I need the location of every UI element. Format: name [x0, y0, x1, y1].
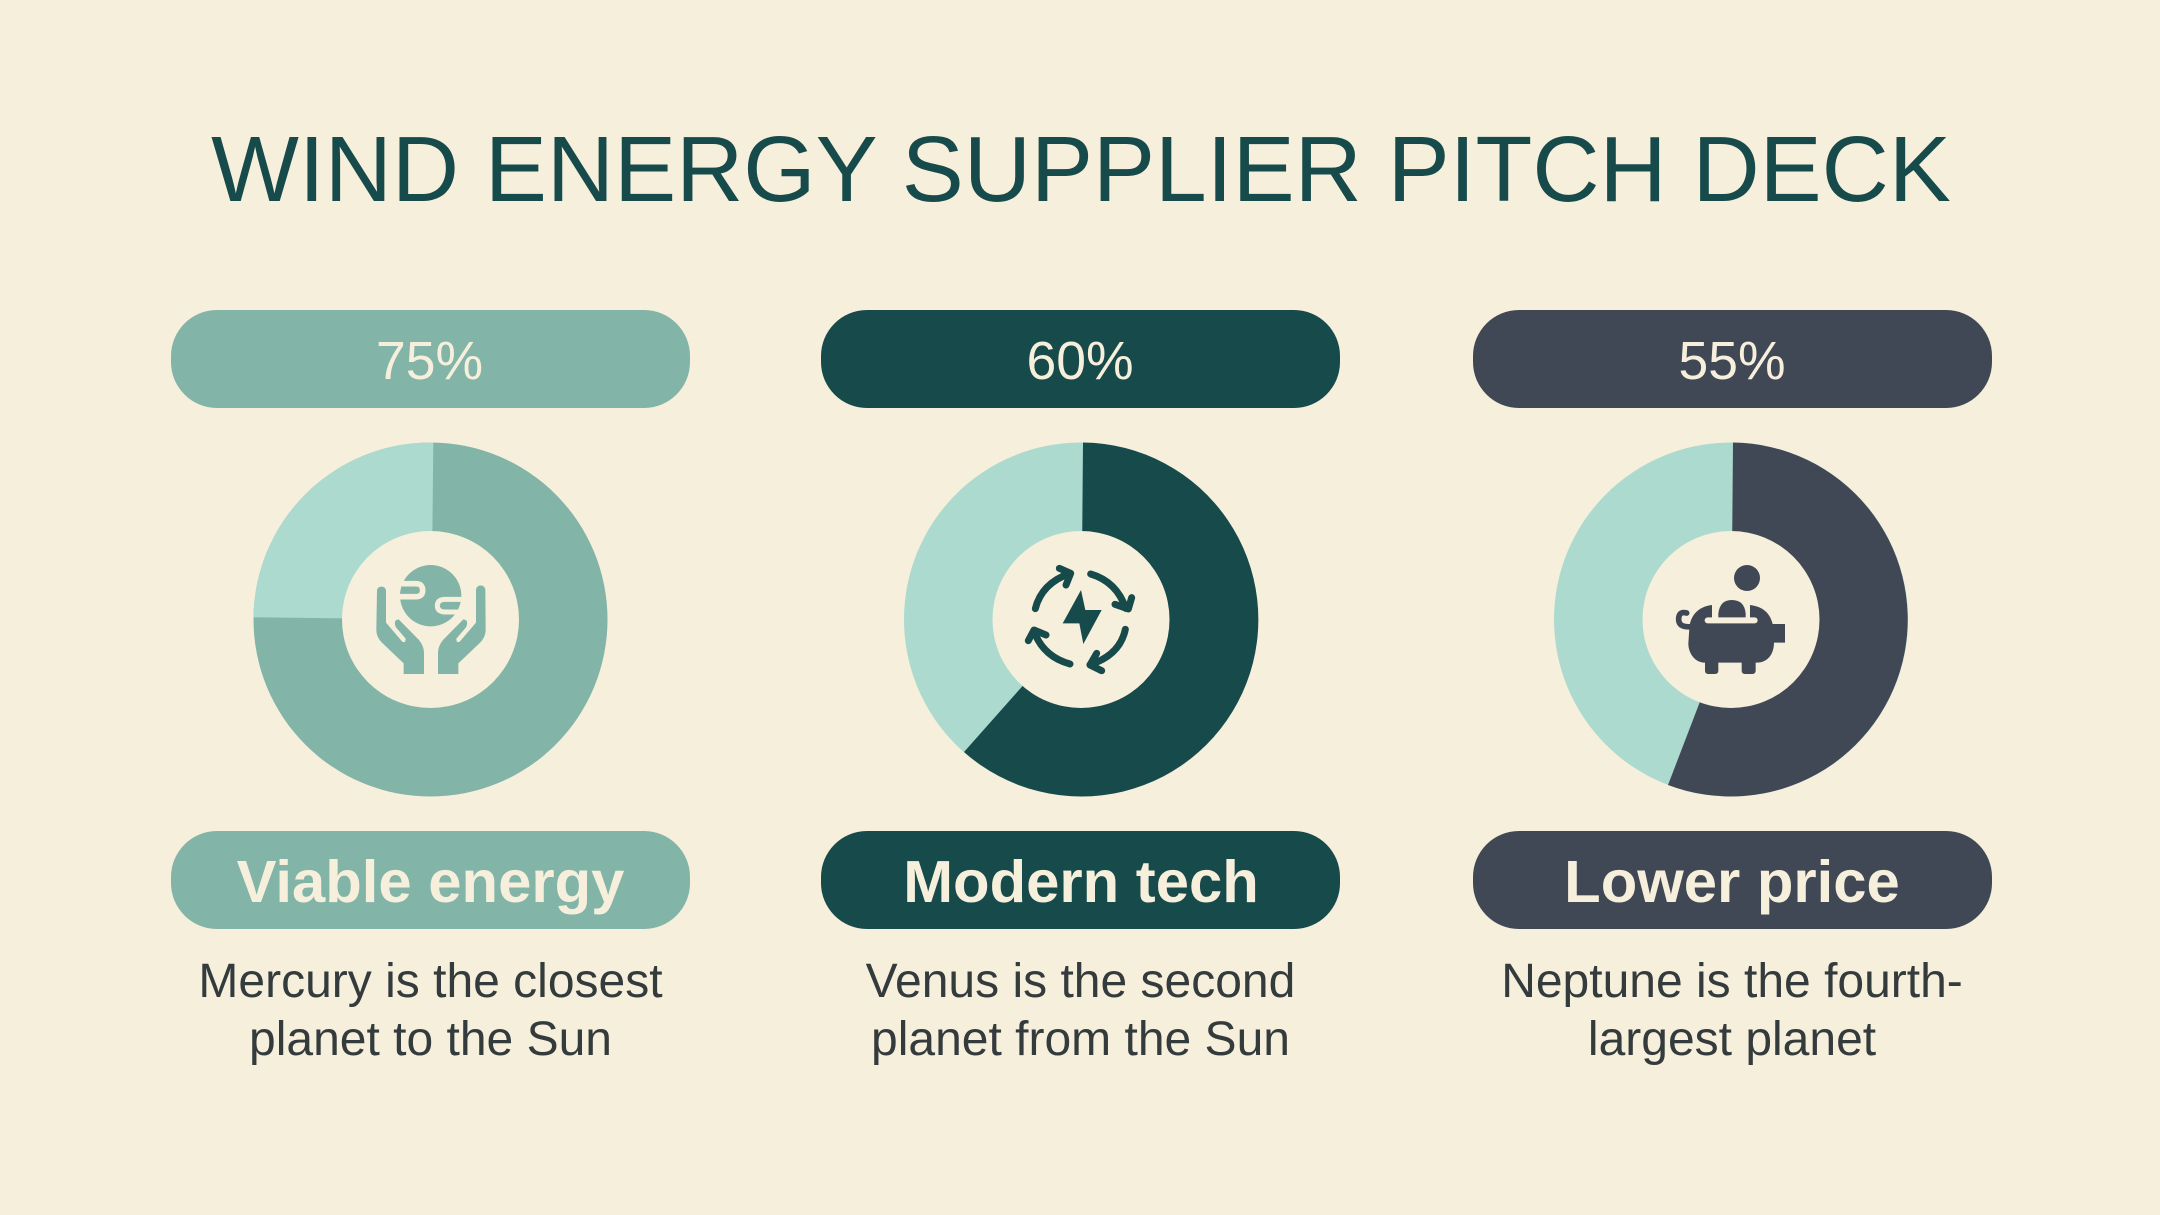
- donut chart: 60%: [904, 442, 1258, 796]
- description: lower price: Neptune is the fourth-: [1501, 955, 1963, 1008]
- percentage pill: 55%: [1473, 310, 1992, 408]
- description: viable energy: planet to the Sun: [249, 1013, 612, 1066]
- heading pill: lower price: [1473, 831, 1992, 929]
- description: viable energy: [198, 955, 663, 1066]
- icon: piggy bank: [1679, 565, 1785, 674]
- icon: energy cycle: [1028, 568, 1132, 671]
- percentage pill: 60%: 60%: [1026, 332, 1134, 391]
- description: viable energy: Mercury is the closest: [198, 955, 663, 1008]
- heading pill: viable energy: Viable energy: [237, 848, 624, 915]
- percentage pill: 75%: [171, 310, 690, 408]
- donut chart: 55%: [1554, 442, 1908, 796]
- description: lower price: [1501, 955, 1963, 1066]
- donut chart: 75%: [254, 442, 608, 796]
- description: lower price: largest planet: [1588, 1013, 1876, 1066]
- heading pill: viable energy: [171, 831, 690, 929]
- panel: modern tech: [821, 310, 1340, 1066]
- description: modern tech: planet from the Sun: [871, 1013, 1290, 1066]
- percentage pill: 60%: [821, 310, 1340, 408]
- title: WIND ENERGY SUPPLIER PITCH DECK: [211, 117, 1951, 221]
- panel: lower price: [1473, 310, 1992, 1066]
- heading pill: lower price: Lower price: [1564, 848, 1900, 915]
- panel: viable energy: [171, 310, 690, 1066]
- description: modern tech: [866, 955, 1295, 1066]
- percentage pill: 75%: 75%: [376, 332, 483, 391]
- percentage pill: 55%: 55%: [1678, 332, 1786, 391]
- heading pill: modern tech: Modern tech: [903, 848, 1259, 915]
- description: modern tech: Venus is the second: [866, 955, 1295, 1008]
- heading pill: modern tech: [821, 831, 1340, 929]
- icon: hands holding globe: [376, 565, 486, 674]
